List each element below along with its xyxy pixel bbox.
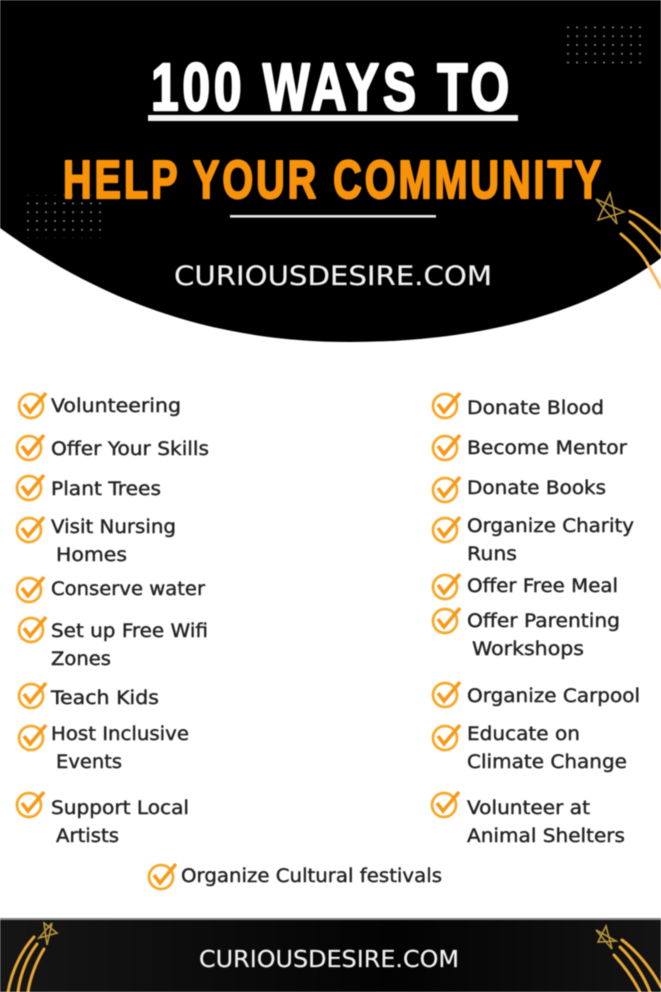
item: Volunteer at Animal Shelters	[432, 792, 625, 847]
item: Organize Charity Runs: Runs	[467, 544, 517, 565]
header website: CURIOUSDESIRE.COM	[174, 261, 492, 292]
item: Educate on Climate Change	[433, 724, 627, 773]
item: Support Local Artists: Artists	[56, 826, 119, 847]
icon: shooting star bottom left	[8, 923, 57, 992]
dots pattern top right	[561, 23, 647, 69]
item: Offer Parenting Workshops: Workshops	[472, 639, 584, 660]
icon: shooting star bottom right	[596, 926, 661, 992]
title: 100 ways to: 100 WAYS TO	[151, 50, 513, 125]
item: Donate Blood: Donate Blood	[467, 398, 604, 419]
item: Plant Trees	[17, 475, 161, 500]
item: Become Mentor	[433, 435, 627, 460]
item: Set up Free Wifi Zones: Zones	[51, 649, 111, 670]
item: Offer Free Meal	[433, 574, 618, 599]
item: Visit Nursing Homes: Homes	[56, 545, 127, 566]
item: Educate on Climate Change: Educate on	[467, 724, 580, 745]
item: Volunteer at Animal Shelters: Animal Shelters	[467, 826, 625, 847]
item: Set up Free Wifi Zones	[19, 617, 208, 670]
item: Host Inclusive Events	[19, 724, 189, 773]
footer website: CURIOUSDESIRE.COM	[199, 947, 459, 973]
dots pattern left	[24, 195, 103, 238]
item: Organize Charity Runs	[433, 516, 634, 565]
icon: shooting star top right	[596, 193, 661, 288]
item: Offer Parenting Workshops	[433, 608, 620, 660]
item: Set up Free Wifi Zones: Set up Free Wifi	[51, 621, 208, 642]
item: Organize Cultural festivals: Organize Cultural festivals	[181, 866, 442, 887]
item: Teach Kids: Teach Kids	[50, 688, 159, 709]
subtitle divider	[230, 215, 436, 218]
item: Volunteering	[19, 393, 181, 418]
item: Organize Charity Runs: Organize Charity	[467, 516, 634, 537]
title underline	[148, 115, 518, 121]
item: Offer Your Skills: Offer Your Skills	[51, 439, 209, 460]
item: Conserve water	[17, 577, 205, 602]
item: Donate Books	[433, 477, 606, 502]
item: Donate Books: Donate Books	[467, 478, 606, 499]
item: Offer Parenting Workshops: Offer Parenting	[467, 611, 620, 632]
item: Organize Carpool	[433, 682, 640, 707]
item: Educate on Climate Change: Climate Change	[467, 752, 627, 773]
item: Visit Nursing Homes: Visit Nursing	[51, 517, 176, 538]
item: Offer Free Meal: Offer Free Meal	[467, 576, 618, 597]
item: Support Local Artists	[17, 792, 189, 847]
item: Support Local Artists: Support Local	[51, 798, 189, 819]
item: Offer Your Skills	[17, 435, 209, 460]
item: Volunteer at Animal Shelters: Volunteer at	[467, 798, 590, 819]
checklist: left column	[17, 393, 209, 847]
item: Host Inclusive Events: Host Inclusive	[51, 724, 189, 745]
item: Organize Carpool: Organize Carpool	[467, 686, 640, 707]
item: Conserve water: Conserve water	[51, 579, 205, 600]
item: Donate Blood	[433, 393, 604, 419]
item: Plant Trees: Plant Trees	[51, 479, 161, 500]
footer bar	[0, 918, 661, 992]
item: Volunteering: Volunteering	[51, 396, 181, 417]
item: Host Inclusive Events: Events	[56, 752, 122, 773]
header black curved panel	[0, 0, 661, 342]
item: Become Mentor: Become Mentor	[467, 438, 627, 459]
item: Visit Nursing Homes	[17, 517, 176, 566]
item: Teach Kids	[19, 683, 159, 709]
checklist: right column	[432, 393, 640, 847]
